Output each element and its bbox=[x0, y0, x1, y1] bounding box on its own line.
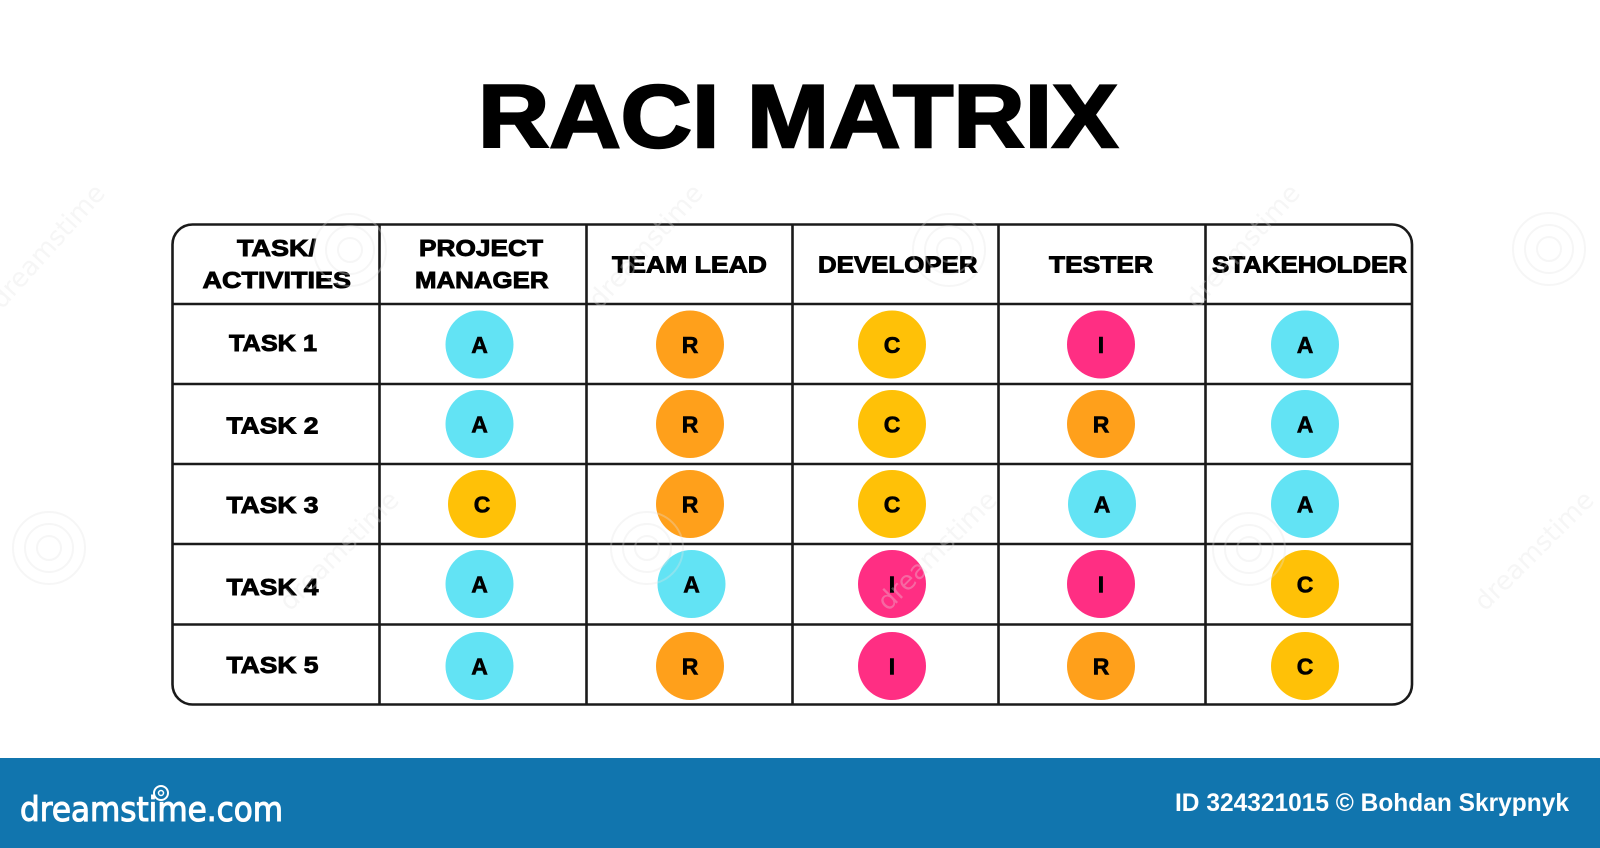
header: stakeholder: STAKEHOLDER bbox=[1212, 252, 1407, 278]
badge C bbox=[448, 470, 516, 538]
badge A bbox=[446, 550, 514, 618]
label: task 5: TASK 5 bbox=[226, 652, 318, 678]
row 4 badges bbox=[446, 550, 1339, 618]
header: task/activities bbox=[202, 235, 351, 293]
badge I: I bbox=[889, 572, 895, 598]
badge A: A bbox=[471, 412, 488, 438]
badge I: I bbox=[1098, 572, 1104, 598]
footer logo: dreamstime.com: dreamstime.com bbox=[20, 790, 283, 830]
watermarks: dreamstime bbox=[1180, 179, 1307, 315]
badge I bbox=[1067, 310, 1135, 378]
badge I bbox=[1067, 550, 1135, 618]
badge R: R bbox=[682, 332, 699, 358]
header: project manager: PROJECT bbox=[419, 235, 544, 261]
badge C: C bbox=[884, 412, 900, 438]
badge A: A bbox=[471, 572, 488, 598]
badge R: R bbox=[682, 492, 699, 518]
watermarks bbox=[0, 179, 1600, 617]
row 5 badges bbox=[446, 632, 1339, 700]
badge R bbox=[656, 632, 724, 700]
header: developer: DEVELOPER bbox=[818, 252, 978, 278]
badge A bbox=[1271, 390, 1339, 458]
badge I: I bbox=[1098, 332, 1104, 358]
row 2 badges bbox=[446, 390, 1339, 458]
watermarks: dreamstime bbox=[583, 179, 710, 315]
row labels bbox=[226, 330, 318, 678]
title: RACI MATRIX bbox=[478, 66, 1118, 166]
label: task 1: TASK 1 bbox=[229, 330, 317, 356]
badge A bbox=[446, 310, 514, 378]
badge A bbox=[1271, 470, 1339, 538]
badge A: A bbox=[471, 654, 488, 680]
badge R bbox=[1067, 390, 1135, 458]
badge C: C bbox=[1297, 654, 1313, 680]
header: project manager: MANAGER bbox=[415, 267, 549, 293]
badge R bbox=[656, 390, 724, 458]
row 1 badges bbox=[446, 310, 1339, 378]
badge C bbox=[858, 470, 926, 538]
badge I bbox=[858, 550, 926, 618]
watermarks: dreamstime bbox=[872, 485, 1003, 617]
badge R: R bbox=[1093, 412, 1110, 438]
header: project manager bbox=[415, 235, 549, 293]
badge C: C bbox=[884, 492, 900, 518]
badge A: A bbox=[683, 572, 700, 598]
label: task 2: TASK 2 bbox=[226, 412, 318, 438]
badge A bbox=[446, 390, 514, 458]
badge R: R bbox=[682, 412, 699, 438]
badge R bbox=[1067, 632, 1135, 700]
badge R bbox=[656, 310, 724, 378]
badge A bbox=[1068, 470, 1136, 538]
header: task/activities: ACTIVITIES bbox=[202, 267, 351, 293]
row 3 badges bbox=[448, 470, 1339, 538]
badge C bbox=[858, 310, 926, 378]
badge C bbox=[1271, 550, 1339, 618]
badge A bbox=[1271, 310, 1339, 378]
badge C: C bbox=[1297, 572, 1313, 598]
badge A: A bbox=[1094, 492, 1110, 518]
badge A bbox=[446, 632, 514, 700]
watermarks: dreamstime bbox=[274, 485, 405, 617]
badge C bbox=[1271, 632, 1339, 700]
badge R: R bbox=[682, 654, 699, 680]
badge C bbox=[858, 390, 926, 458]
badge A: A bbox=[1297, 412, 1313, 438]
header: task/activities: TASK/ bbox=[237, 235, 317, 261]
header row bbox=[202, 235, 1407, 293]
label: task 4: TASK 4 bbox=[226, 574, 318, 600]
badge A bbox=[658, 550, 726, 618]
badge A: A bbox=[1297, 332, 1313, 358]
table grid bbox=[172, 224, 1412, 704]
label: task 3: TASK 3 bbox=[226, 492, 318, 518]
footer credit: ID 324321015 © Bohdan Skrypnyk bbox=[1175, 789, 1569, 817]
header: tester: TESTER bbox=[1049, 252, 1153, 278]
badge A: A bbox=[471, 332, 488, 358]
footer bar bbox=[0, 758, 1600, 848]
badge R bbox=[656, 470, 724, 538]
badge I: I bbox=[889, 654, 895, 680]
watermarks: dreamstime bbox=[1469, 485, 1600, 617]
badge I bbox=[858, 632, 926, 700]
header: team lead: TEAM LEAD bbox=[612, 252, 767, 278]
badge R: R bbox=[1093, 654, 1110, 680]
badge C: C bbox=[884, 332, 900, 358]
badge A: A bbox=[1297, 492, 1313, 518]
badge C: C bbox=[474, 492, 490, 518]
